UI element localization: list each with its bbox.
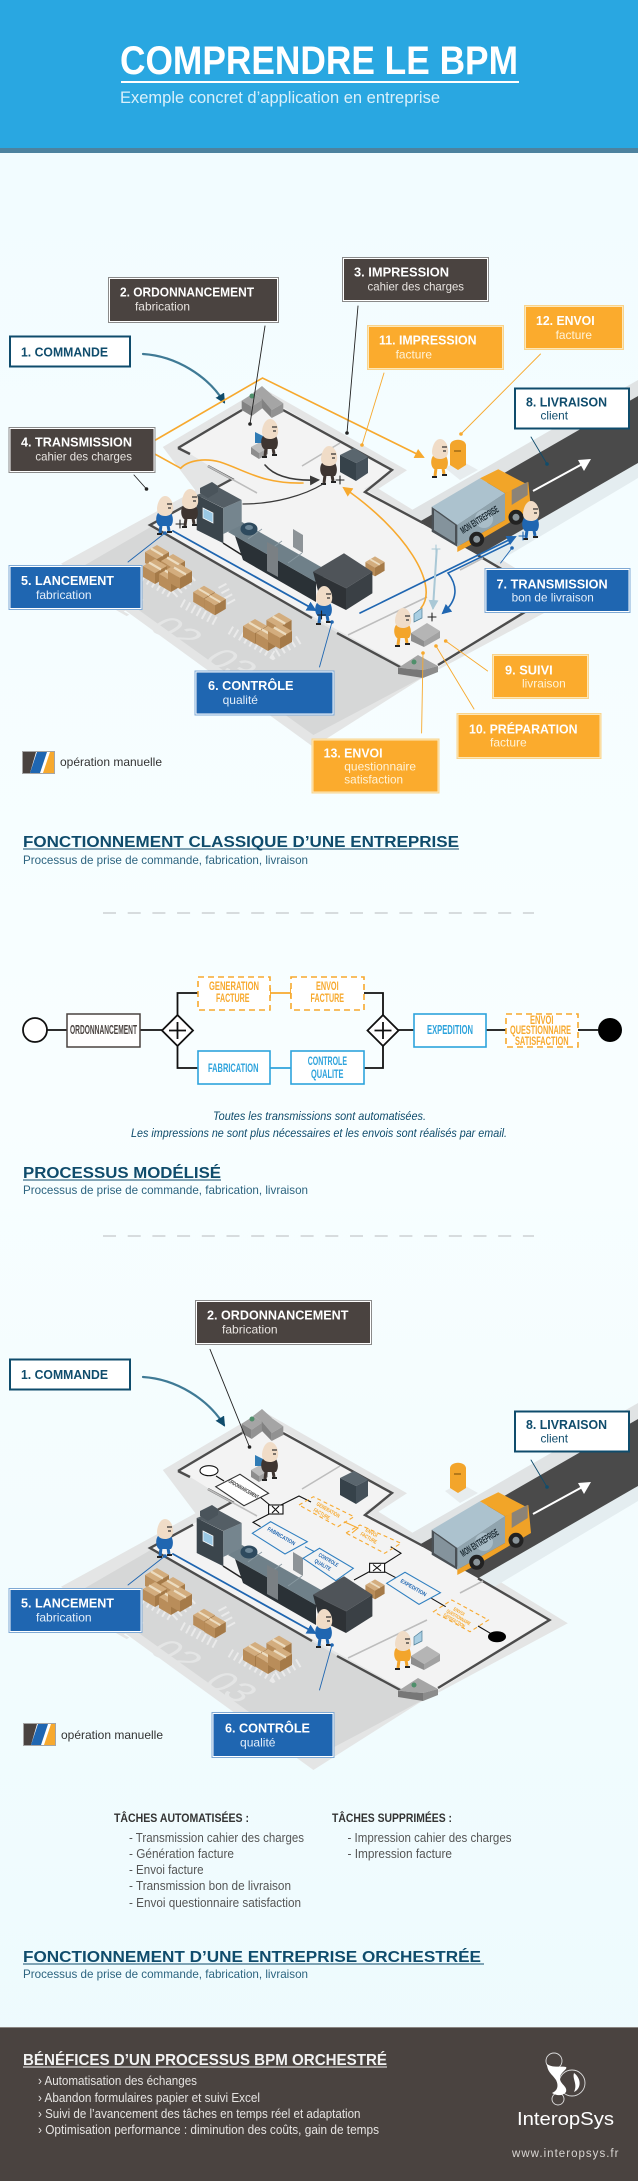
list: automated tasks: - Envoi questionnaire satisfaction xyxy=(129,1896,301,1910)
benefits heading: BÉNÉFICES D’UN PROCESSUS BPM ORCHESTRÉ xyxy=(23,2052,387,2069)
caption xyxy=(131,1109,507,1140)
list: automated tasks: - Génération facture xyxy=(129,1847,234,1861)
label: 6 controle: 6. CONTRÔLE xyxy=(208,678,294,693)
label: 1 commande xyxy=(10,336,130,366)
task: envoi questionnaire satisfaction: QUESTIONNAIRE xyxy=(510,1025,571,1037)
list: removed tasks: - Impression facture xyxy=(348,1847,452,1861)
isometric factory scene: orchestrated company xyxy=(61,1403,638,1770)
BPMN overlay on the factory floor: ENVOI xyxy=(364,1528,379,1539)
label: 1 commande: 1. COMMANDE xyxy=(21,1368,108,1382)
benefits list xyxy=(38,2074,379,2137)
label: 10 preparation: facture xyxy=(490,736,527,750)
label: 4 transmission xyxy=(9,428,155,472)
list: removed tasks: TÂCHES SUPPRIMÉES : xyxy=(332,1810,452,1825)
label: 5 lancement: 5. LANCEMENT xyxy=(21,574,114,588)
list: automated tasks xyxy=(114,1810,304,1910)
task: envoi facture: ENVOI xyxy=(316,979,339,993)
task: controle qualite: CONTROLE xyxy=(308,1054,347,1068)
task: envoi questionnaire satisfaction: ENVOI xyxy=(530,1015,554,1027)
heading: modelled process: PROCESSUS MODÉLISÉ xyxy=(23,1165,221,1182)
start event xyxy=(23,1018,47,1042)
label: 11 impression: 11. IMPRESSION xyxy=(379,333,477,347)
label: 7 transmission xyxy=(485,568,630,612)
label: 13 envoi: questionnaire xyxy=(344,760,416,774)
list: automated tasks: - Transmission bon de livraison xyxy=(129,1879,291,1893)
parallel gateway xyxy=(368,1015,398,1046)
BPMN overlay on the factory floor: FACTURE xyxy=(359,1532,378,1546)
BPMN overlay on the factory floor: QUESTIONNAIRE xyxy=(445,1609,472,1627)
task: envoi facture: FACTURE xyxy=(310,991,344,1005)
label: 9 suivi: livraison xyxy=(522,676,566,690)
label: 12 envoi: facture xyxy=(556,328,592,342)
BPMN overlay on the factory floor: CONTROLE xyxy=(317,1553,339,1569)
BPMN overlay on the factory floor: FACTURE xyxy=(312,1508,331,1522)
BPMN overlay on the factory floor xyxy=(200,1466,506,1642)
title: COMPRENDRE LE BPM xyxy=(120,39,518,83)
label: 8 livraison: client xyxy=(540,408,569,422)
list: automated tasks: - Transmission cahier des charges xyxy=(129,1831,304,1845)
label: 2 ordonnancement: fabrication xyxy=(135,300,190,314)
task: fabrication: FABRICATION xyxy=(208,1061,258,1075)
parallel gateway xyxy=(162,1015,193,1046)
label: 13 envoi xyxy=(312,739,439,793)
BPMN overlay on the factory floor: FABRICATION xyxy=(266,1527,296,1547)
task: envoi facture xyxy=(291,977,364,1010)
BPMN overlay on the factory floor: QUALITE xyxy=(313,1559,332,1573)
label: 1 commande xyxy=(10,1360,130,1390)
task: ordonnancement xyxy=(67,1014,140,1047)
label: 8 livraison xyxy=(515,1412,629,1452)
workers in the orchestrated scene xyxy=(156,1442,411,1669)
label: 2 ordonnancement xyxy=(196,1300,372,1344)
footer panel xyxy=(0,2027,638,2181)
label: 6 controle xyxy=(195,671,334,715)
caption: Les impressions ne sont plus nécessaires et les envois sont réalisés par email. xyxy=(131,1126,507,1140)
isometric factory scene: classic company xyxy=(61,380,638,747)
label: 2 ordonnancement xyxy=(108,278,278,322)
label: 5 lancement: 5. LANCEMENT xyxy=(21,1597,114,1611)
list: removed tasks: - Impression cahier des charges xyxy=(348,1831,512,1845)
benefits list: › Suivi de l’avancement des tâches en temps réel et adaptation xyxy=(38,2107,361,2121)
task: expedition: EXPEDITION xyxy=(427,1023,473,1037)
label: 10 preparation: 10. PRÉPARATION xyxy=(469,722,578,737)
label: 2 ordonnancement: 2. ORDONNANCEMENT xyxy=(120,286,254,300)
list: removed tasks xyxy=(332,1810,512,1861)
task: generation facture: FACTURE xyxy=(216,991,250,1005)
label: 2 ordonnancement: 2. ORDONNANCEMENT xyxy=(207,1308,349,1322)
subheading: Processus de prise de commande, fabrication, livraison xyxy=(23,853,308,867)
label: 9 suivi: 9. SUIVI xyxy=(505,663,553,677)
process arrows in the orchestrated scene xyxy=(128,1349,549,1690)
legend: manual operation: opération manuelle xyxy=(60,755,162,769)
workers in the classic scene xyxy=(156,419,539,646)
label: 8 livraison: 8. LIVRAISON xyxy=(526,1418,607,1432)
label: 12 envoi xyxy=(524,306,624,350)
label: 6 controle: 6. CONTRÔLE xyxy=(225,1720,310,1735)
benefits list: › Automatisation des échanges xyxy=(38,2074,197,2088)
label: 7 transmission: 7. TRANSMISSION xyxy=(496,578,608,592)
task: fabrication xyxy=(198,1051,270,1084)
InteropSys logo mark xyxy=(546,2053,585,2105)
process arrows in the classic scene xyxy=(128,306,549,733)
label: 3 impression xyxy=(342,258,488,302)
BPMN overlay on the factory floor: ORDONNANCEMENT xyxy=(227,1479,260,1501)
label: 13 envoi: satisfaction xyxy=(344,772,403,786)
label: 3 impression: cahier des charges xyxy=(368,280,464,294)
task: controle qualite: QUALITE xyxy=(311,1067,344,1081)
label: 5 lancement: fabrication xyxy=(36,588,92,602)
label: 11 impression: facture xyxy=(396,347,432,361)
label: 11 impression xyxy=(368,326,504,370)
legend: manual operation xyxy=(24,1724,163,1746)
label: 12 envoi: 12. ENVOI xyxy=(536,314,595,328)
label: 6 controle: qualité xyxy=(240,1736,276,1750)
task: ordonnancement: ORDONNANCEMENT xyxy=(70,1022,137,1037)
label: 8 livraison xyxy=(515,388,629,428)
BPMN process diagram xyxy=(23,977,622,1084)
label: 10 preparation xyxy=(457,714,601,758)
heading: orchestrated company xyxy=(23,1949,484,1981)
label: 6 controle: qualité xyxy=(223,693,258,707)
InteropSys wordmark: InteropSys xyxy=(517,2109,614,2129)
header banner xyxy=(0,0,638,153)
benefits list: › Abandon formulaires papier et suivi Excel xyxy=(38,2091,260,2105)
task: envoi questionnaire satisfaction: SATISFACTION xyxy=(515,1036,569,1048)
subtitle: Exemple concret d’application en entreprise xyxy=(120,88,440,107)
task: expedition xyxy=(414,1014,486,1047)
list: automated tasks: TÂCHES AUTOMATISÉES : xyxy=(114,1810,249,1825)
label: 4 transmission: 4. TRANSMISSION xyxy=(21,436,132,450)
label: 7 transmission: bon de livraison xyxy=(512,591,594,605)
label: 5 lancement: fabrication xyxy=(36,1611,92,1625)
task: envoi questionnaire satisfaction xyxy=(506,1014,578,1048)
label: 3 impression: 3. IMPRESSION xyxy=(354,266,449,280)
label: 8 livraison: client xyxy=(540,1431,569,1445)
BPMN overlay on the factory floor: EXPEDITION xyxy=(399,1579,427,1598)
label: 9 suivi xyxy=(492,654,588,698)
label: 13 envoi: 13. ENVOI xyxy=(324,746,383,760)
BPMN overlay on the factory floor: SATISFACTION xyxy=(442,1613,466,1630)
BPMN overlay on the factory floor: GENERATION xyxy=(315,1502,341,1520)
heading: classic company: FONCTIONNEMENT CLASSIQUE D’UNE ENTREPRISE xyxy=(23,834,459,851)
end event xyxy=(598,1018,622,1042)
label: 2 ordonnancement: fabrication xyxy=(222,1322,278,1336)
label: 6 controle xyxy=(212,1712,334,1758)
label: 5 lancement xyxy=(9,1588,142,1632)
label: 5 lancement xyxy=(9,566,142,610)
heading: classic company xyxy=(23,834,459,867)
BPMN overlay on the factory floor: ENVOI xyxy=(452,1607,466,1618)
website: www.interopsys.fr xyxy=(511,2148,619,2160)
legend: manual operation xyxy=(22,752,162,774)
caption: Toutes les transmissions sont automatisées. xyxy=(213,1109,426,1123)
label: 8 livraison: 8. LIVRAISON xyxy=(526,396,607,410)
heading: modelled process xyxy=(23,1165,308,1197)
task: controle qualite xyxy=(291,1051,364,1084)
subheading: Processus de prise de commande, fabrication, livraison xyxy=(23,1967,308,1981)
subheading: Processus de prise de commande, fabrication, livraison xyxy=(23,1183,308,1197)
task: generation facture: GENERATION xyxy=(209,979,259,993)
label: 1 commande: 1. COMMANDE xyxy=(21,345,108,359)
legend: manual operation: opération manuelle xyxy=(61,1728,163,1742)
label: 4 transmission: cahier des charges xyxy=(35,450,132,464)
heading: orchestrated company: FONCTIONNEMENT D’UNE ENTREPRISE ORCHESTRÉE xyxy=(23,1949,481,1966)
task: generation facture xyxy=(198,977,270,1010)
list: automated tasks: - Envoi facture xyxy=(129,1863,204,1877)
benefits list: › Optimisation performance : diminution des coûts, gain de temps xyxy=(38,2123,379,2137)
